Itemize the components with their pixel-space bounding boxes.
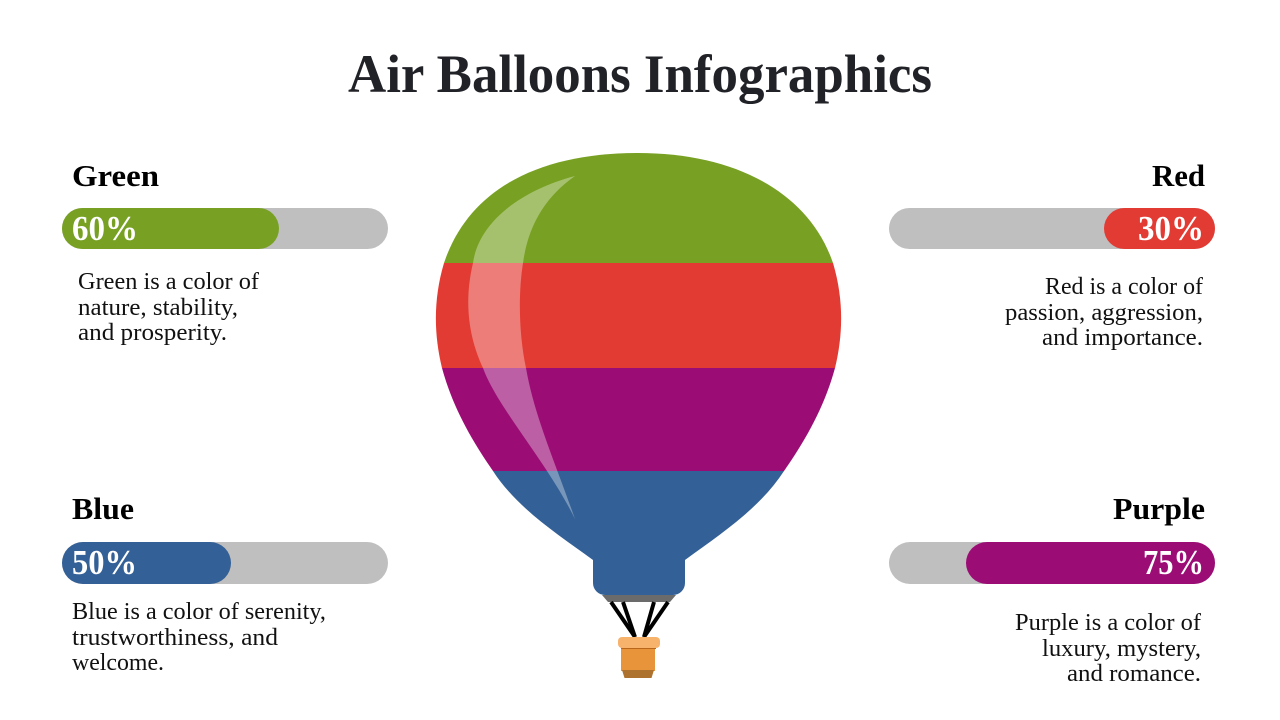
progress bar: blue 50% [62,542,388,584]
text block: green: and prosperity. [78,320,227,346]
progress bar: green 60% [62,208,388,249]
balloon band: red [436,263,841,368]
balloon band: green [444,153,833,263]
heading: purple: Purple [1113,491,1205,526]
text block: blue: trustworthiness, and [72,625,278,651]
text block: red: Red is a color of [1045,274,1203,300]
panel: blue [62,491,388,676]
title: Air Balloons Infographics [348,44,932,104]
text block: purple: luxury, mystery, [1042,636,1201,662]
text block: green: nature, stability, [78,295,238,321]
panel: red [889,158,1215,351]
heading: red: Red [1152,158,1205,193]
balloon band: purple [442,368,835,471]
balloon highlight [468,176,575,519]
balloon band: blue [493,471,784,595]
text block: green: Green is a color of [78,269,259,295]
progress bar: blue 50%: 50% [72,543,137,582]
text block: red: and importance. [1042,325,1203,351]
progress bar: red 30% [889,208,1215,249]
heading: blue: Blue [72,491,134,526]
text block: purple: and romance. [1067,661,1201,687]
progress bar: red 30%: 30% [1138,209,1204,248]
ropes [611,602,668,637]
progress bar: green 60%: 60% [72,209,138,248]
balloon collar [602,595,676,602]
progress bar: purple 75%: 75% [1143,543,1204,582]
progress bar: purple 75% [889,542,1215,584]
text block: red [1005,274,1203,351]
text block: red: passion, aggression, [1005,300,1203,326]
text block: purple: Purple is a color of [1015,610,1201,636]
text block: blue: welcome. [72,650,164,676]
panel: green [62,158,388,346]
basket [618,637,660,678]
text block: green [78,269,259,346]
text block: purple [1015,610,1201,687]
panel: purple [889,491,1215,687]
icon: hot air balloon [436,153,841,678]
text block: blue: Blue is a color of serenity, [72,599,326,625]
text block: blue [72,599,326,676]
heading: green: Green [72,158,159,193]
